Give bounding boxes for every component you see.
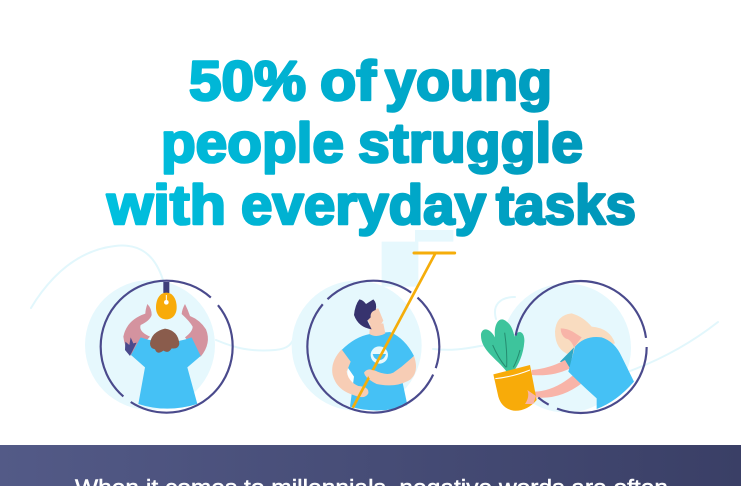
hair: [354, 299, 376, 329]
illustration: man with squeegee: [292, 230, 455, 413]
hand: [525, 390, 536, 404]
left arm: [123, 304, 152, 356]
dark banner: [0, 445, 741, 486]
pale circle backdrop: [502, 283, 631, 413]
far arm: [532, 360, 570, 375]
title: 50%: [189, 49, 306, 112]
title: tasks: [496, 173, 636, 236]
far sleeve: [560, 347, 574, 368]
face: [367, 308, 383, 326]
white gap in body: [347, 362, 355, 388]
title: young: [385, 49, 552, 112]
squeegee blade: [414, 248, 455, 257]
ring: [101, 281, 233, 413]
ring: [307, 281, 439, 413]
right arm: [182, 304, 208, 357]
pot: [493, 365, 537, 411]
face: [561, 328, 582, 347]
illustration: woman carrying a potted plant: [481, 281, 647, 413]
illustration: person changing a light bulb: [85, 280, 233, 413]
bulb cord and socket: [163, 282, 169, 293]
leaf veins: [493, 333, 520, 367]
front arm: [364, 356, 416, 385]
title: everyday: [241, 173, 486, 236]
pot highlight: [495, 370, 530, 379]
pale circle backdrop: [85, 280, 215, 410]
title: people: [161, 111, 344, 174]
title: with: [106, 173, 226, 236]
tattoo: [125, 337, 137, 356]
shirt logo: [371, 346, 388, 364]
shirt: [568, 337, 634, 409]
pale window backdrop: [382, 230, 453, 287]
shirt: [342, 332, 414, 410]
neck: [369, 323, 385, 336]
bulb: [156, 293, 177, 319]
shirt: [131, 337, 201, 409]
ring: [515, 281, 647, 413]
title: of: [320, 49, 376, 112]
near arm: [533, 375, 582, 398]
hair: [150, 329, 179, 353]
pale circle backdrop: [292, 281, 422, 411]
background swirl line: [31, 246, 718, 371]
hair: [555, 313, 615, 355]
back arm: [332, 349, 368, 397]
title: [106, 49, 636, 236]
hand on pole: [366, 370, 377, 378]
plant leaves: [481, 319, 524, 372]
squeegee pole: [353, 254, 435, 407]
bulb filament: [165, 295, 168, 302]
title: struggle: [358, 111, 583, 174]
